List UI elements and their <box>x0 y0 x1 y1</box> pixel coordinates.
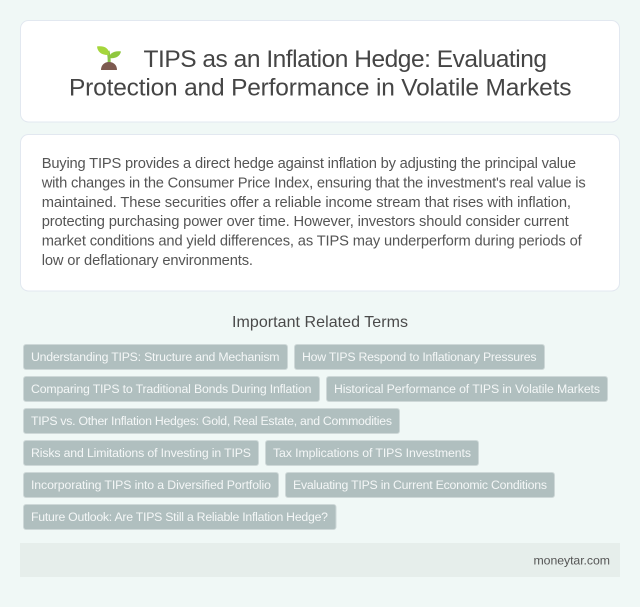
chip: comparing to bonds: Comparing TIPS to Traditional Bonds During Inflation <box>31 382 312 396</box>
chip: diversified portfolio <box>24 472 278 498</box>
text block: summary paragraph: Buying TIPS provides a direct hedge against inflation by adjusting the principal value <box>42 156 576 172</box>
chip: tax <box>266 440 478 466</box>
icon: seedling <box>97 46 121 70</box>
text block: summary paragraph: low or deflationary environments. <box>42 253 253 269</box>
panel: title card <box>20 20 620 122</box>
panel: related term chips <box>24 344 608 530</box>
title: TIPS as an Inflation Hedge: Evaluating <box>144 46 547 73</box>
chip: risks: Risks and Limitations of Investing in TIPS <box>31 446 251 460</box>
chip: current conditions: Evaluating TIPS in Current Economic Conditions <box>293 478 547 492</box>
chip: current conditions <box>286 472 554 498</box>
chip: diversified portfolio: Incorporating TIPS into a Diversified Portfolio <box>31 478 271 492</box>
chip: understanding TIPS <box>24 344 288 370</box>
footer <box>20 543 620 577</box>
title <box>69 46 572 102</box>
chip: comparing to bonds <box>24 376 320 402</box>
heading: important related terms: Important Related Terms <box>232 314 408 331</box>
chip: tax: Tax Implications of TIPS Investments <box>273 446 471 460</box>
text block: summary paragraph: with changes in the Consumer Price Index, ensuring that the investment's real value is <box>41 175 586 191</box>
chip: understanding TIPS: Understanding TIPS: Structure and Mechanism <box>31 350 280 364</box>
chip: future outlook <box>24 504 336 530</box>
text block: summary paragraph: market conditions and yield differences, as TIPS may underperform during periods of <box>42 233 583 249</box>
panel: summary card <box>20 134 620 291</box>
chip: inflationary pressures <box>294 344 544 370</box>
chip: risks <box>24 440 258 466</box>
chip: historical performance: Historical Performance of TIPS in Volatile Markets <box>334 382 600 396</box>
text block: summary paragraph: protecting purchasing power over time. However, investors should consider current <box>42 214 569 230</box>
footer: moneytar.com <box>534 553 610 567</box>
chip: inflationary pressures: How TIPS Respond to Inflationary Pressures <box>302 350 536 364</box>
text block: summary paragraph: maintained. These securities offer a reliable income stream that rises with inflation, <box>42 195 571 211</box>
chip: other hedges <box>24 408 400 434</box>
text block: summary paragraph <box>41 156 586 269</box>
chip: other hedges: TIPS vs. Other Inflation Hedges: Gold, Real Estate, and Commodities <box>31 414 392 428</box>
chip: historical performance <box>326 376 608 402</box>
chip: future outlook: Future Outlook: Are TIPS Still a Reliable Inflation Hedge? <box>31 510 328 524</box>
title: Protection and Performance in Volatile Markets <box>69 75 572 102</box>
